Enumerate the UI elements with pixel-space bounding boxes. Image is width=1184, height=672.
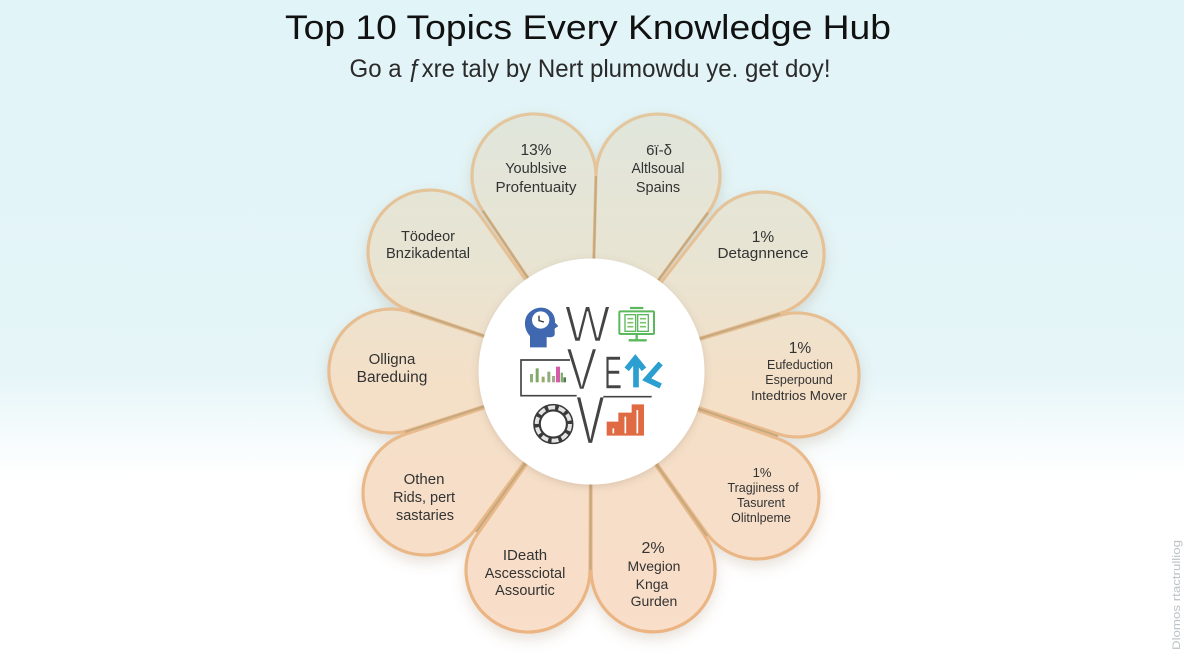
petal 4 shape — [591, 313, 859, 437]
monogram letters: E — [604, 347, 622, 398]
icon: orange bar chart — [607, 404, 644, 436]
icon: head with clock — [525, 308, 558, 347]
icon: blue arrows — [627, 359, 661, 387]
monogram letters: W — [565, 296, 610, 353]
petal 9 shape — [329, 309, 591, 433]
monogram letters — [565, 296, 622, 458]
petal 10 label — [386, 229, 470, 262]
petal 6 label: 2% — [641, 540, 665, 557]
monogram frame lines — [521, 360, 652, 397]
petal 1 label: 13% — [520, 142, 552, 159]
petal 3 shape — [591, 192, 824, 372]
petal 1 label — [496, 142, 577, 196]
petal 9 label — [357, 351, 427, 386]
petal 3 label — [718, 229, 808, 262]
petal 5 label: Tasurent — [737, 496, 785, 510]
petal 7 label — [485, 547, 565, 599]
petal 7 label: Ascessciotal — [485, 566, 565, 582]
petal 8 label: Rids, pert — [393, 490, 455, 506]
icon: book on monitor — [619, 308, 654, 340]
petal 5 label: Tragjiness of — [727, 481, 799, 495]
petal 7 shape — [466, 372, 591, 632]
monogram letters: V — [566, 337, 598, 403]
petal 2 shape — [591, 114, 720, 372]
petal 8 shape — [363, 372, 591, 555]
icon: mini bar chart — [530, 367, 566, 382]
petal 1 label: Profentuaity — [496, 180, 577, 196]
subtitle: Go a ƒxre taly by Nert plumowdu ye. get doy! — [350, 55, 830, 83]
petal 4 label: Esperpound — [765, 373, 833, 387]
petal 5 label: Olitnlpeme — [731, 511, 791, 525]
hub icons — [521, 308, 661, 441]
petal 2 label: Spains — [636, 180, 680, 196]
petal 2 label — [632, 142, 684, 196]
petal 1 shape — [472, 114, 596, 372]
petal 6 shape — [591, 372, 715, 632]
petal 10 shape — [368, 190, 591, 372]
petal 8 label — [393, 471, 455, 524]
petal 4 label: Eufeduction — [767, 358, 833, 372]
petal wheel — [329, 114, 859, 632]
petal 4 label — [751, 340, 847, 403]
petal 2 label: 6ï-δ — [646, 142, 672, 159]
central hub circle — [478, 258, 704, 484]
petal 10 label: Bnzikadental — [386, 246, 470, 262]
petal 10 label: Töodeor — [401, 229, 455, 245]
petal 6 label — [628, 540, 680, 609]
petal 7 label: Assourtic — [495, 583, 555, 599]
petal 1 label: Youblsive — [505, 161, 567, 177]
petal 6 label: Gurden — [631, 593, 677, 609]
title: Top 10 Topics Every Knowledge Hub — [285, 9, 891, 47]
monogram letters: V — [576, 382, 605, 458]
petal 4 label: Intedtrios Mover — [751, 389, 847, 403]
petal 2 label: Altlsoual — [632, 161, 684, 177]
petal 5 label — [727, 465, 799, 525]
petal 5 shape — [591, 372, 819, 559]
petal 3 label: Detagnnence — [718, 246, 808, 262]
petal 3 label: 1% — [752, 229, 774, 246]
petal 5 label: 1% — [753, 465, 772, 480]
vertical side caption: Dlomos rtactrulliog — [1171, 540, 1183, 650]
petal 9 label: Olligna — [369, 351, 416, 368]
petal 6 label: Knga — [636, 576, 669, 592]
petal 9 label: Bareduing — [357, 369, 427, 386]
petal 7 label: IDeath — [503, 547, 547, 564]
petal 6 label: Mvegion — [628, 558, 680, 574]
petal 8 label: sastaries — [396, 508, 454, 524]
icon: gear ring — [537, 407, 570, 441]
petal 8 label: Othen — [404, 471, 444, 488]
petal 4 label: 1% — [789, 340, 811, 357]
